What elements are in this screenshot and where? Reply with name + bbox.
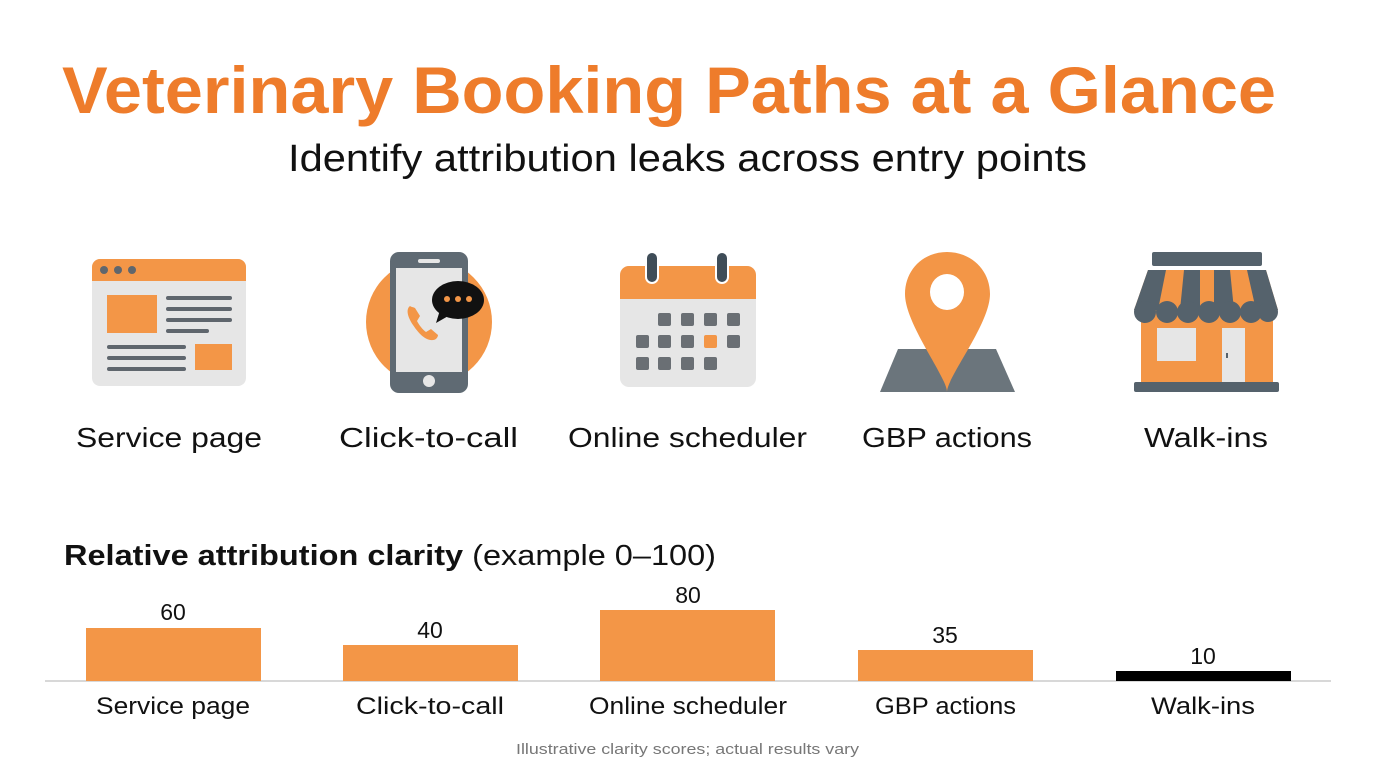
bar chart: Walk-ins: [1151, 693, 1255, 720]
icon: calendar: [620, 252, 756, 387]
label: service page: Service page: [76, 422, 262, 453]
subtitle: Identify attribution leaks across entry points: [288, 138, 1087, 180]
icon: service page browser: [92, 259, 246, 386]
chart heading: Relative attribution clarity (example 0–100): [64, 540, 716, 572]
label: click-to-call: Click-to-call: [339, 422, 518, 453]
bar chart: 60: [160, 599, 186, 625]
icon: GBP map pin: [880, 252, 1015, 392]
bar chart: 35: [932, 622, 958, 648]
bar chart: [45, 582, 1331, 720]
label: walk-ins: Walk-ins: [1144, 422, 1268, 453]
bar chart: 10: [1190, 643, 1216, 669]
footnote: Illustrative clarity scores; actual results vary: [516, 741, 860, 758]
icon: storefront: [1134, 252, 1279, 392]
label: GBP actions: GBP actions: [862, 422, 1032, 453]
label: online scheduler: Online scheduler: [568, 422, 807, 453]
title: Veterinary Booking Paths at a Glance: [62, 53, 1276, 127]
bar chart: Online scheduler: [589, 693, 787, 720]
bar chart: 80: [675, 582, 701, 608]
icon: click-to-call phone: [366, 252, 492, 393]
bar chart: Click-to-call: [356, 693, 504, 720]
bar chart: 40: [417, 617, 443, 643]
bar chart: GBP actions: [875, 693, 1016, 720]
bar chart: Service page: [96, 693, 250, 720]
